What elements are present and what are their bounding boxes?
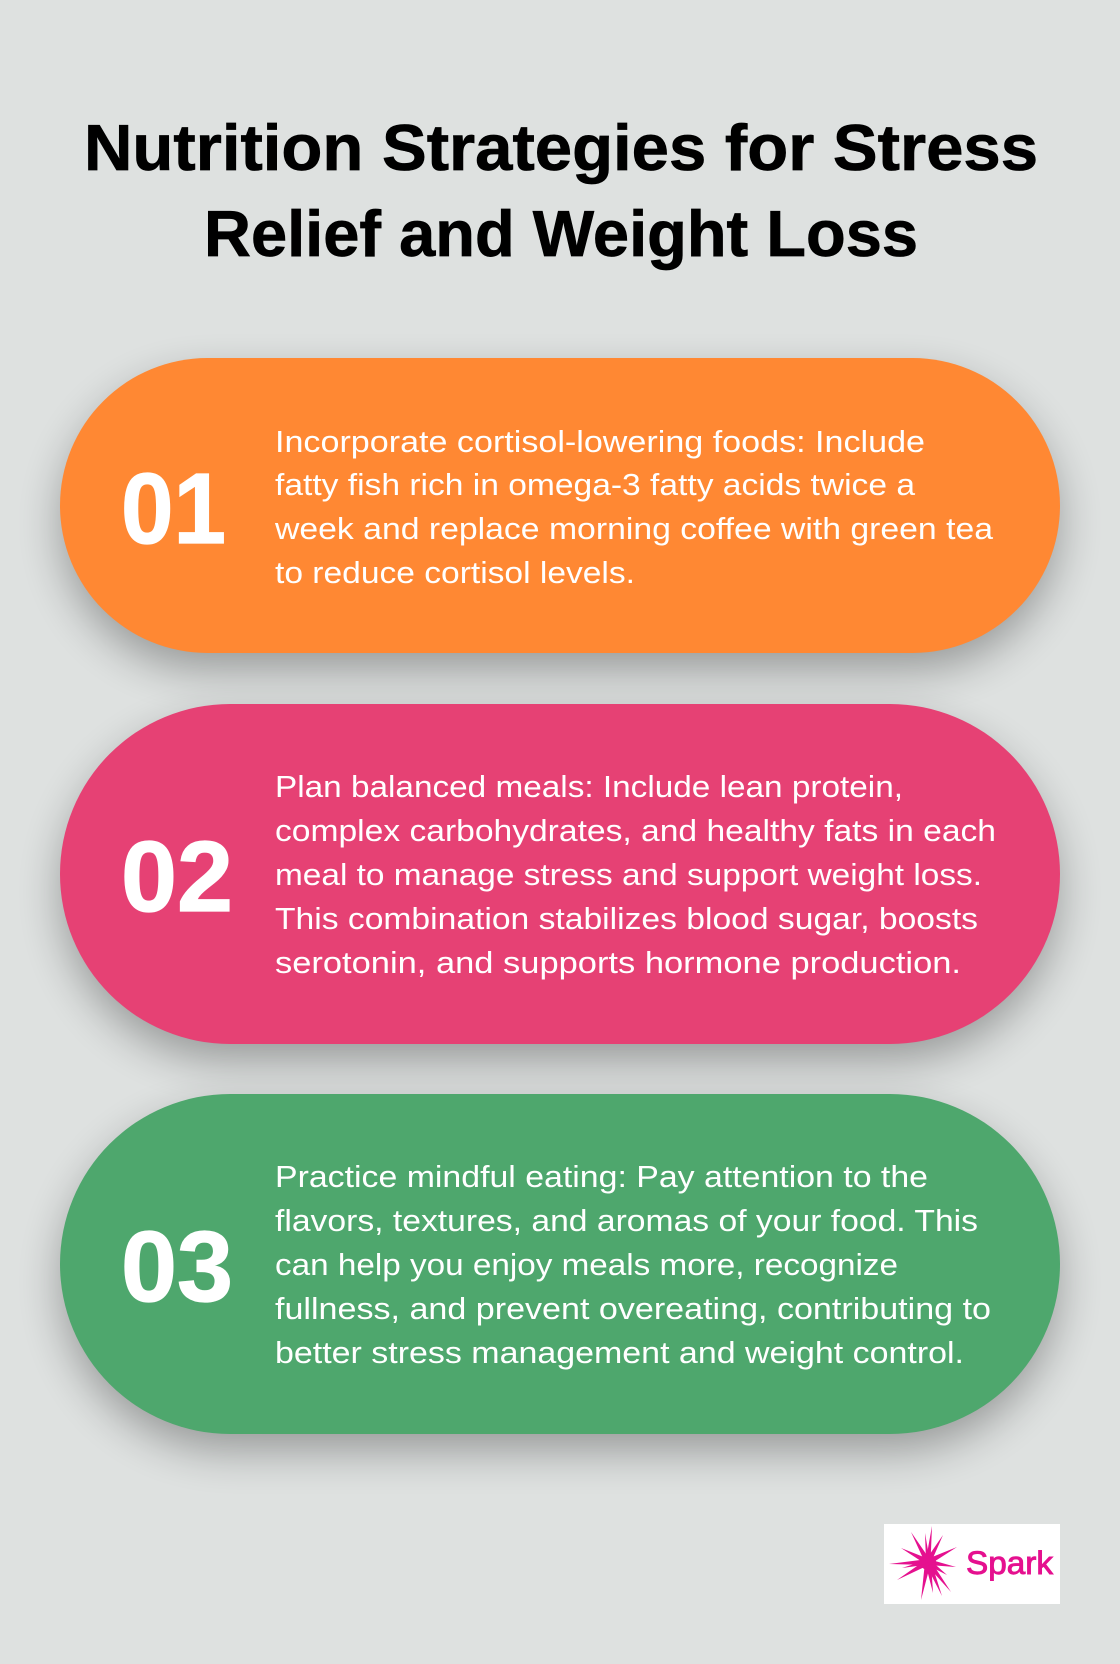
- step 02 text: complex carbohydrates, and healthy fats in each: [275, 813, 996, 848]
- step 02 text: This combination stabilizes blood sugar, boosts: [275, 901, 978, 936]
- step 03 text: flavors, textures, and aromas of your food. This: [275, 1203, 978, 1238]
- title: Nutrition Strategies for Stress: [84, 111, 1038, 184]
- card background: green: [60, 1094, 1060, 1434]
- number 02: 02: [121, 821, 233, 933]
- step 01 text: Incorporate cortisol-lowering foods: Include: [275, 424, 925, 459]
- card background: pink: [60, 704, 1060, 1044]
- panel: step 03: [60, 1094, 1060, 1450]
- step 02 text: meal to manage stress and support weight loss.: [275, 857, 982, 892]
- card background: orange: [60, 358, 1060, 653]
- panel: step 02: [60, 704, 1060, 1060]
- step 03 text: better stress management and weight control.: [275, 1335, 964, 1370]
- step 01 text: to reduce cortisol levels.: [275, 555, 635, 590]
- title: [84, 111, 1038, 270]
- number 01: 01: [121, 453, 226, 565]
- logo: Spark: [884, 1524, 1060, 1604]
- step 02 text: serotonin, and supports hormone production.: [275, 945, 961, 980]
- title: Relief and Weight Loss: [204, 197, 918, 270]
- step 01 text: [274, 424, 994, 590]
- step 01 text: fatty fish rich in omega-3 fatty acids twice a: [275, 467, 916, 502]
- step 03 text: fullness, and prevent overeating, contributing to: [275, 1291, 991, 1326]
- step 03 text: can help you enjoy meals more, recognize: [275, 1247, 898, 1282]
- logo wordmark: Spark: [966, 1545, 1054, 1581]
- step 03 text: Practice mindful eating: Pay attention to the: [275, 1159, 928, 1194]
- step 02 text: Plan balanced meals: Include lean protein,: [275, 769, 903, 804]
- step 01 text: week and replace morning coffee with green tea: [274, 511, 994, 546]
- panel: step 01: [60, 358, 1060, 669]
- step 02 text: [275, 769, 996, 980]
- number 03: 03: [121, 1211, 233, 1323]
- step 03 text: [275, 1159, 991, 1370]
- icon: starburst: [889, 1526, 957, 1600]
